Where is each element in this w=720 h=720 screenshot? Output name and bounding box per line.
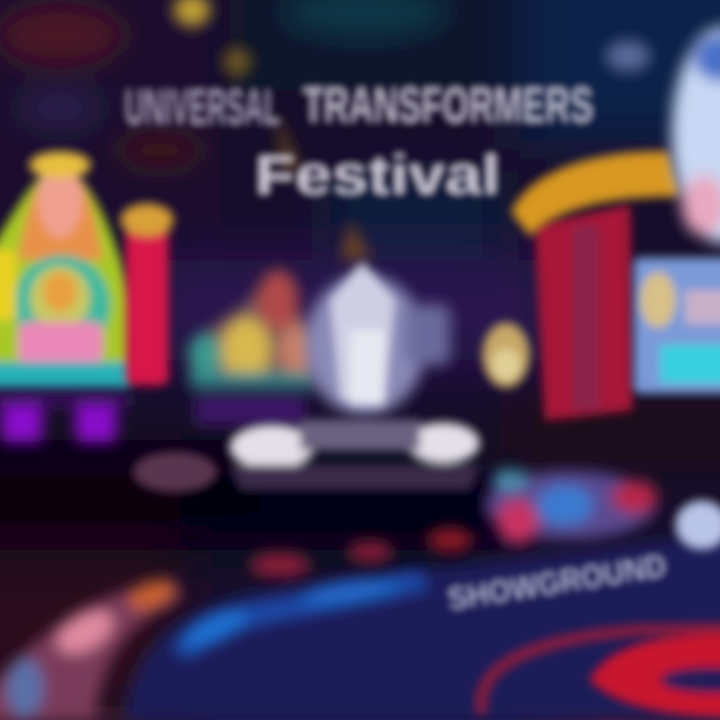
small lantern: [483, 323, 529, 387]
title: TRANSFORMERS: [303, 77, 593, 133]
left carousel: [0, 152, 173, 442]
top lights: [174, 0, 650, 260]
floor: right light patch: [676, 501, 720, 549]
floor: red dots: [250, 528, 472, 577]
red tower golden roof: [512, 152, 680, 236]
title: UNIVERSAL: [125, 79, 280, 135]
red tower: [512, 152, 680, 420]
floor caption: SHOWGROUND: [445, 547, 668, 617]
floor: mosaic: [485, 470, 657, 544]
floor: [0, 470, 720, 720]
carousel body: [0, 152, 130, 388]
right globe: [672, 27, 720, 243]
carousel red column: [121, 204, 173, 385]
floor: blue band: [170, 570, 430, 660]
tower base: [133, 420, 480, 492]
title: [125, 77, 593, 206]
top decorations: [0, 0, 450, 168]
carousel purple feet: [0, 392, 130, 442]
floor: navy circle: [125, 525, 720, 720]
centre white tower: [133, 262, 480, 492]
floor: left swirl: [0, 575, 180, 720]
right booth: [634, 27, 720, 393]
floor: red arcs: [481, 628, 720, 718]
small carousel: [189, 270, 316, 425]
title: Festival: [255, 143, 500, 206]
